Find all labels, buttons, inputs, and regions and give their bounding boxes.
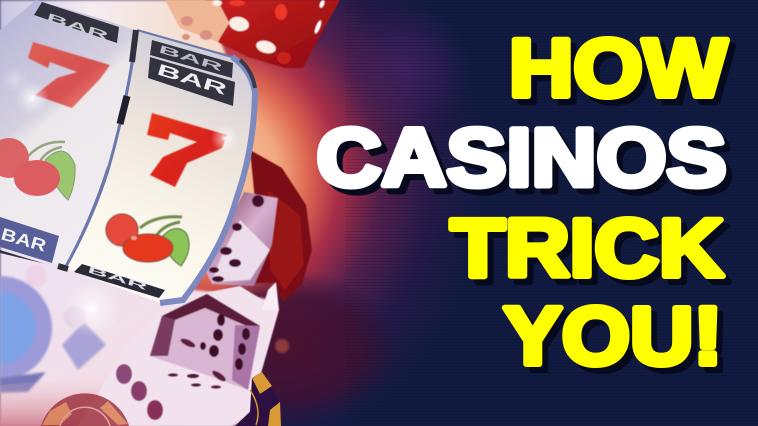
reel: left [0,0,135,268]
reel: right [58,30,255,303]
pale area behind reels, top [0,0,226,55]
bar label, top left reel: BAR [45,11,110,43]
bar labels, bottom left reel: BAR [0,225,48,256]
title shadow: YOU! [510,297,728,388]
small pink die [205,192,278,286]
pale peach die, top [165,0,230,42]
bar label, bottom right reel: BAR [86,264,150,293]
translucent purple die [150,294,260,390]
slot machine [0,0,255,303]
bar label, top left reel [34,2,119,43]
pale area below reels [0,235,276,426]
bar labels, top right reel: BAR [155,62,230,99]
bar labels, top right reel: BAR [157,43,224,74]
bar label, bottom right reel [74,264,165,298]
title shadow: CASINOS [322,118,732,210]
bar labels, top right reel [148,40,235,106]
red seven, left reel [28,42,110,108]
cherries, left reel [0,138,75,200]
blue poker chip, left [0,265,106,393]
light flares [1,66,289,353]
title: YOU!: YOU! [504,291,722,382]
title shadow: TRICK [456,209,730,300]
title: TRICK: TRICK [450,203,724,294]
dark red die, middle right [246,150,312,302]
gold poker chip, right [235,372,281,426]
bottom poker chip [41,393,129,426]
title shadow: HOW [515,29,734,120]
title shadow [322,29,734,388]
large pale die with pips [78,282,279,426]
cherries, right reel [106,214,189,266]
red seven, right reel [147,113,227,187]
title: HOW: HOW [509,23,728,114]
red die, top [212,0,340,68]
title: CASINOS: CASINOS [316,112,726,204]
bar labels, bottom left reel [0,217,59,265]
bottom left pink wash [0,375,160,426]
